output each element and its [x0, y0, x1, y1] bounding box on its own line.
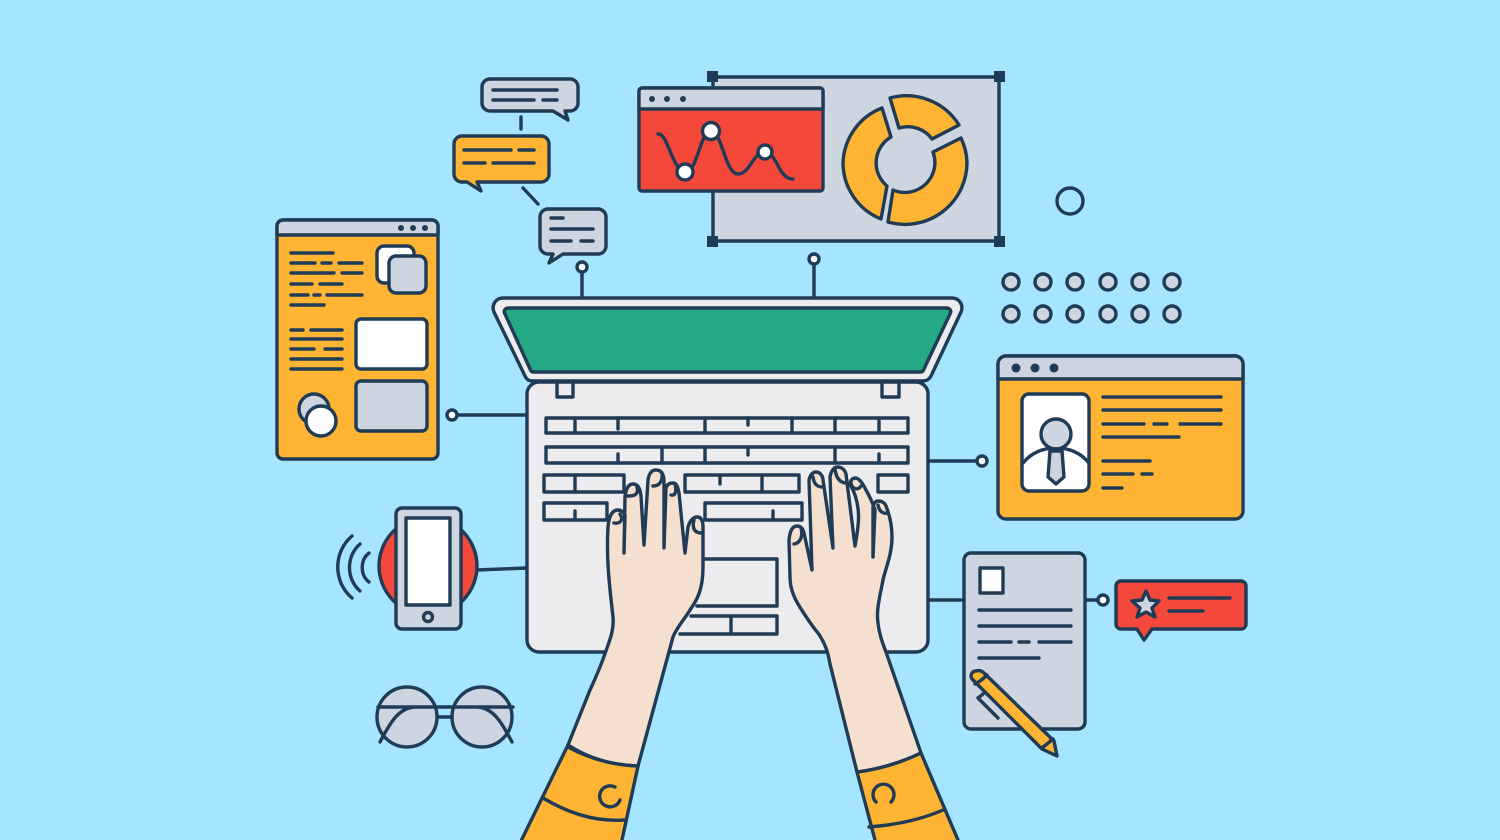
panel: left orange page window [277, 220, 438, 459]
panel: profile window [998, 356, 1243, 519]
right sleeve outline [857, 753, 958, 840]
panel: chart board with donut [707, 71, 1005, 247]
icon: phone with signal [338, 508, 477, 629]
panel: red line chart window [639, 88, 823, 191]
left sleeve [521, 745, 638, 840]
left cuff button [600, 786, 620, 807]
icon: pen [971, 671, 1057, 756]
left arm and hand [521, 470, 703, 840]
laptop base [527, 382, 928, 652]
dot grid [1003, 274, 1180, 322]
right arm and hand [789, 467, 958, 840]
connector lines and nodes [447, 254, 1108, 605]
profile photo [1022, 394, 1089, 491]
panel: document with pen [964, 553, 1085, 756]
icon: star [1132, 591, 1159, 617]
right cuff button [873, 784, 894, 802]
bubble: orange [454, 136, 549, 191]
donut chart [843, 96, 967, 224]
laptop [493, 298, 962, 652]
icon: small circle [1057, 188, 1083, 214]
left forearm and hand [568, 470, 703, 766]
laptop screen [493, 298, 962, 381]
line chart [658, 122, 793, 180]
signal waves [338, 536, 369, 598]
bubble: gray lower [540, 209, 606, 263]
callout: red star rating bubble [1116, 581, 1246, 640]
keyboard [544, 418, 908, 520]
chat bubbles [454, 79, 606, 263]
touchpad [697, 559, 777, 606]
bubble: gray top [482, 79, 578, 120]
right sleeve [857, 753, 958, 840]
touchpad buttons [680, 616, 777, 634]
icon: glasses [377, 687, 513, 747]
right forearm and hand [789, 467, 921, 772]
left sleeve outline [521, 745, 638, 840]
hinges [557, 382, 899, 397]
